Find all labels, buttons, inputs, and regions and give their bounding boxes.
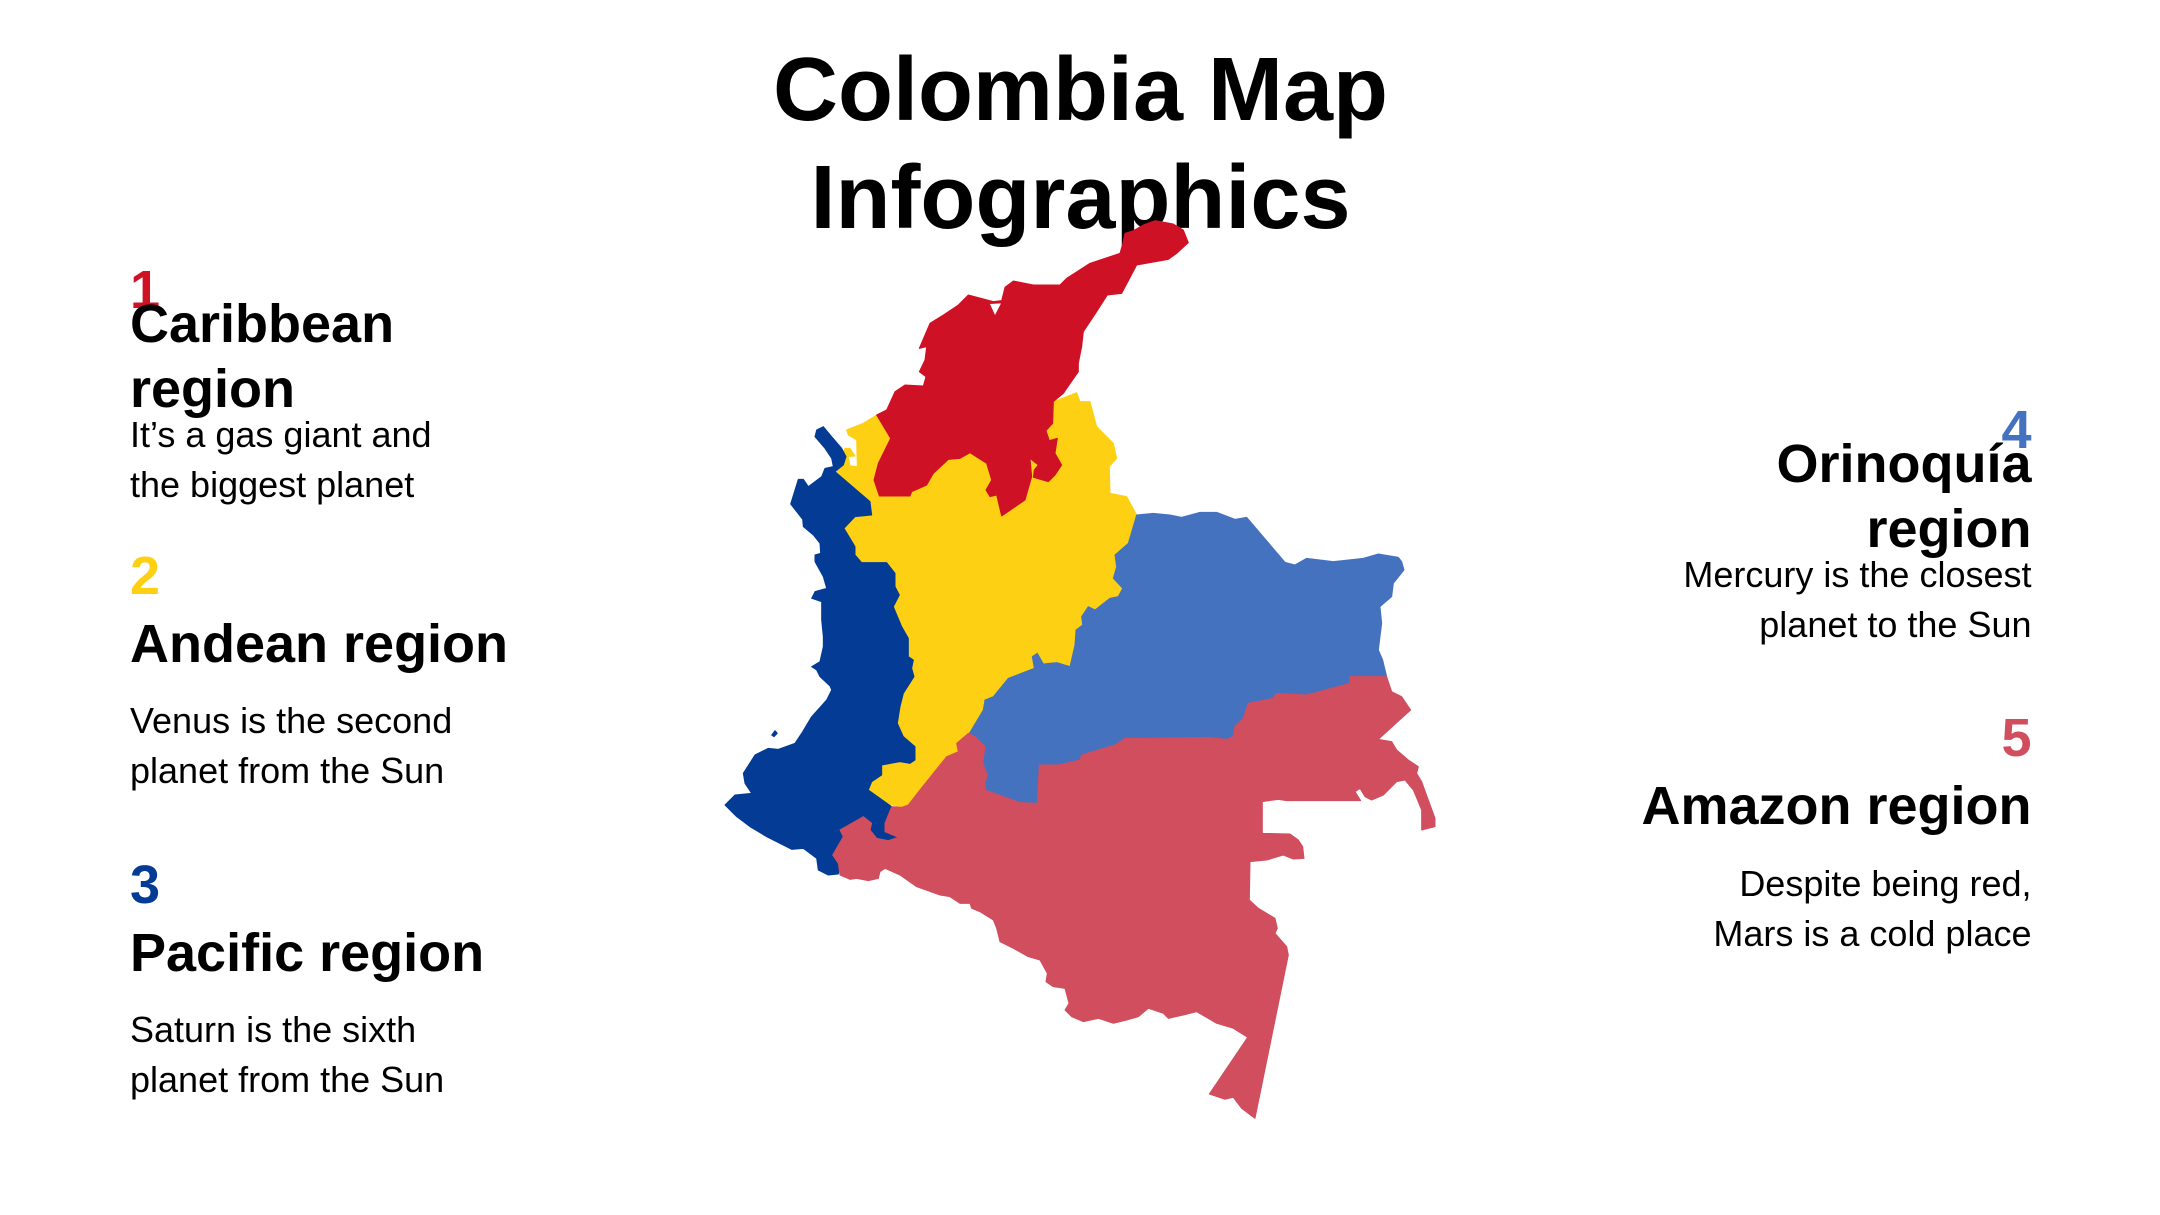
item 3: Pacific region: 3 bbox=[130, 855, 160, 915]
title: Infographics bbox=[810, 148, 1351, 248]
title bbox=[773, 40, 1388, 248]
item 5: Amazon region bbox=[1641, 708, 2032, 954]
item 2: Andean region bbox=[130, 546, 508, 791]
item 1: Caribbean region: It’s a gas giant and bbox=[130, 414, 432, 455]
region: Amazon (rose) bbox=[833, 677, 1435, 1118]
item 4: Orinoquia region: planet to the Sun bbox=[1759, 604, 2032, 645]
item 3: Pacific region: Pacific region bbox=[130, 923, 484, 983]
region: Caribbean (red) bbox=[874, 221, 1188, 516]
item 2: Andean region: Andean region bbox=[130, 614, 508, 674]
item 1: Caribbean region bbox=[130, 260, 432, 505]
item 1: Caribbean region: region bbox=[130, 359, 295, 419]
item 2: Andean region: Venus is the second bbox=[130, 700, 452, 741]
item 4: Orinoquia region: Mercury is the closest bbox=[1683, 554, 2032, 595]
item 5: Amazon region: Mars is a cold place bbox=[1713, 913, 2032, 954]
item 5: Amazon region: 5 bbox=[2001, 708, 2032, 768]
region: Pacific (navy) bbox=[725, 427, 915, 875]
item 3: Pacific region: Saturn is the sixth bbox=[130, 1009, 416, 1050]
item 5: Amazon region: Despite being red, bbox=[1739, 863, 2032, 904]
item 4: Orinoquia region: Orinoquía bbox=[1776, 434, 2032, 494]
item 4: Orinoquia region bbox=[1683, 400, 2032, 645]
item 4: Orinoquia region: 4 bbox=[2001, 400, 2032, 460]
item 3: Pacific region bbox=[130, 855, 484, 1100]
item 2: Andean region: 2 bbox=[130, 546, 160, 606]
region: Andean (yellow) bbox=[836, 393, 1137, 807]
item 4: Orinoquia region: region bbox=[1866, 499, 2032, 559]
item 1: Caribbean region: the biggest planet bbox=[130, 464, 414, 505]
item 1: Caribbean region: 1 bbox=[130, 260, 160, 320]
map of Colombia bbox=[725, 221, 1435, 1118]
title: Colombia Map bbox=[773, 40, 1388, 140]
item 2: Andean region: planet from the Sun bbox=[130, 750, 444, 791]
item 3: Pacific region: planet from the Sun bbox=[130, 1059, 444, 1100]
item 5: Amazon region: Amazon region bbox=[1641, 776, 2032, 836]
region: Orinoquia (blue) bbox=[969, 512, 1404, 810]
item 1: Caribbean region: Caribbean bbox=[130, 294, 394, 354]
